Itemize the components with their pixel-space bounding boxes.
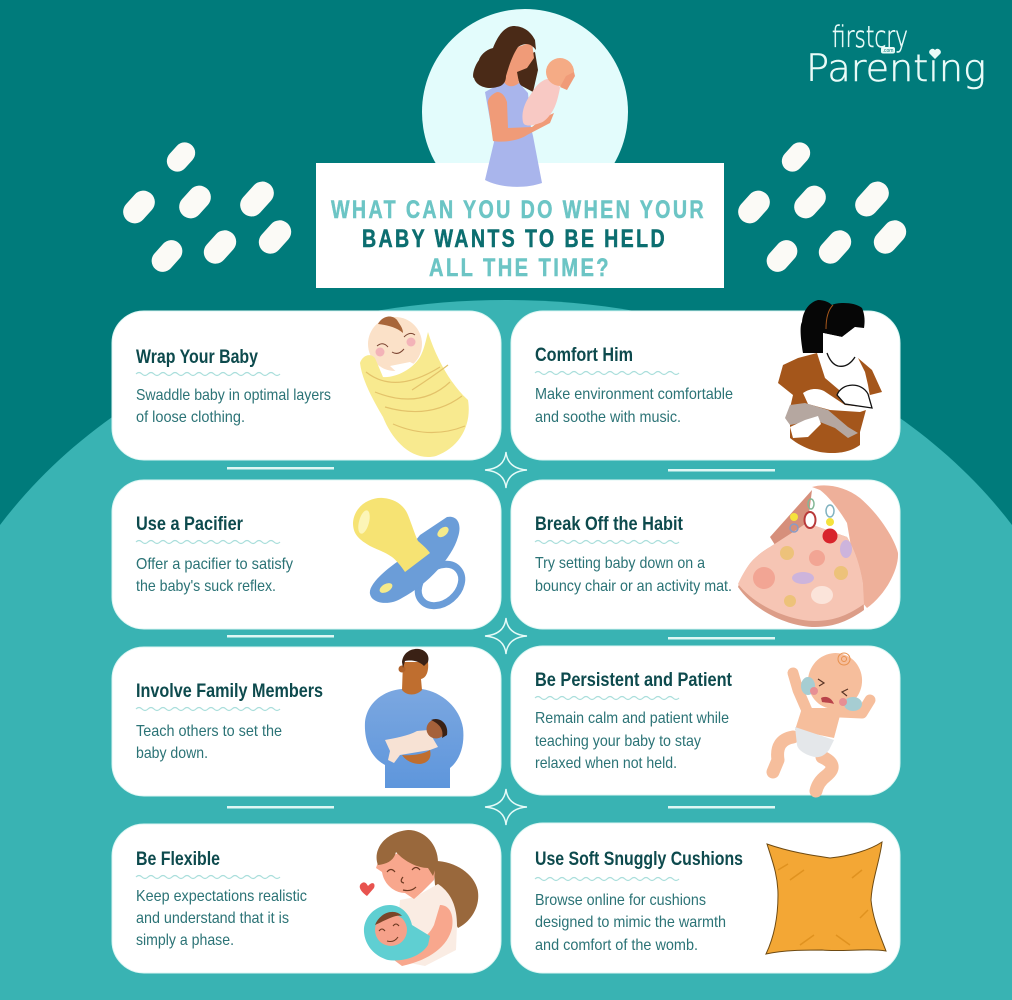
card: Break Off the Habit: bouncy chair or an activity mat.: [535, 578, 732, 595]
card: Use Soft Snuggly Cushions: and comfort of the womb.: [535, 937, 698, 954]
card: Be Persistent and Patient: Be Persistent and Patient: [535, 670, 733, 691]
card: Break Off the Habit: Break Off the Habit: [535, 514, 684, 535]
card: Use a Pacifier: Offer a pacifier to satisfy: [136, 556, 293, 573]
card: Be Flexible: simply a phase.: [136, 932, 234, 949]
card: Break Off the Habit: [511, 480, 900, 629]
card: Be Persistent and Patient: [511, 646, 900, 795]
logo: FirstCry Parenting: .com: [882, 48, 894, 54]
card: Break Off the Habit: Try setting baby down on a: [535, 555, 705, 572]
card: Wrap Your Baby: of loose clothing.: [136, 409, 245, 426]
card: Involve Family Members: [112, 647, 501, 796]
title panel: WHAT CAN YOU DO WHEN YOUR: [331, 196, 706, 224]
divider left 2: [227, 635, 334, 638]
sparkle 3: [485, 789, 527, 825]
card: Comfort Him: Make environment comfortable: [535, 386, 733, 403]
light teal dome background: [0, 300, 1012, 1000]
card: Be Flexible: Keep expectations realistic: [136, 888, 307, 905]
pill decoration left: [118, 138, 296, 276]
illustration: father holding baby: [365, 649, 463, 788]
card: Be Flexible: and understand that it is: [136, 910, 289, 927]
divider left 1: [227, 467, 334, 470]
divider right 3: [668, 806, 775, 808]
illustration: pacifier: [353, 498, 470, 614]
illustration: mother holding newborn: [473, 26, 575, 187]
illustration: mother hugging baby: [360, 830, 478, 966]
hero circle: [422, 9, 628, 215]
card: Comfort Him: Comfort Him: [535, 345, 633, 366]
card: Use Soft Snuggly Cushions: [511, 823, 900, 973]
card: Use a Pacifier: the baby's suck reflex.: [136, 578, 276, 595]
sparkle 2: [485, 618, 527, 654]
card: Be Flexible: [112, 824, 501, 973]
divider right 2: [668, 637, 775, 640]
card: Comfort Him: [511, 300, 900, 460]
card: Be Flexible: Be Flexible: [136, 849, 220, 870]
card: Use Soft Snuggly Cushions: designed to mimic the warmth: [535, 914, 726, 931]
card: Wrap Your Baby: Swaddle baby in optimal layers: [136, 387, 331, 404]
card: Use Soft Snuggly Cushions: Browse online for cushions: [535, 892, 706, 909]
divider right 1: [668, 469, 775, 472]
card: Wrap Your Baby: [112, 311, 501, 460]
card: Involve Family Members: Teach others to set the: [136, 723, 282, 740]
card: Comfort Him: and soothe with music.: [535, 409, 681, 426]
illustration: mother nursing baby: [778, 300, 882, 453]
title panel: BABY WANTS TO BE HELD: [362, 225, 667, 253]
logo: FirstCry Parenting: [806, 20, 986, 90]
card: Involve Family Members: baby down.: [136, 745, 208, 762]
card: Be Persistent and Patient: teaching your baby to stay: [535, 733, 701, 750]
card: Involve Family Members: Involve Family Members: [136, 681, 323, 702]
illustration: swaddled baby: [360, 317, 469, 457]
illustration: crying baby: [773, 647, 870, 791]
title panel: ALL THE TIME?: [429, 254, 611, 282]
card: Use Soft Snuggly Cushions: Use Soft Snuggly Cushions: [535, 849, 743, 870]
pill decoration right: [733, 138, 911, 276]
card: Wrap Your Baby: Wrap Your Baby: [136, 347, 258, 368]
divider left 3: [227, 806, 334, 808]
illustration: orange cushion: [766, 842, 886, 954]
card: Be Persistent and Patient: relaxed when not held.: [535, 755, 677, 772]
card: Use a Pacifier: Use a Pacifier: [136, 514, 244, 535]
card: Use a Pacifier: [112, 480, 501, 629]
logo: FirstCry Parenting: firstcry: [832, 20, 908, 54]
card: Be Persistent and Patient: Remain calm and patient while: [535, 710, 729, 727]
logo: FirstCry Parenting: Parenting: [806, 47, 986, 90]
illustration: activity play mat: [738, 485, 898, 627]
sparkle 1: [485, 452, 527, 488]
title panel: [316, 163, 724, 288]
